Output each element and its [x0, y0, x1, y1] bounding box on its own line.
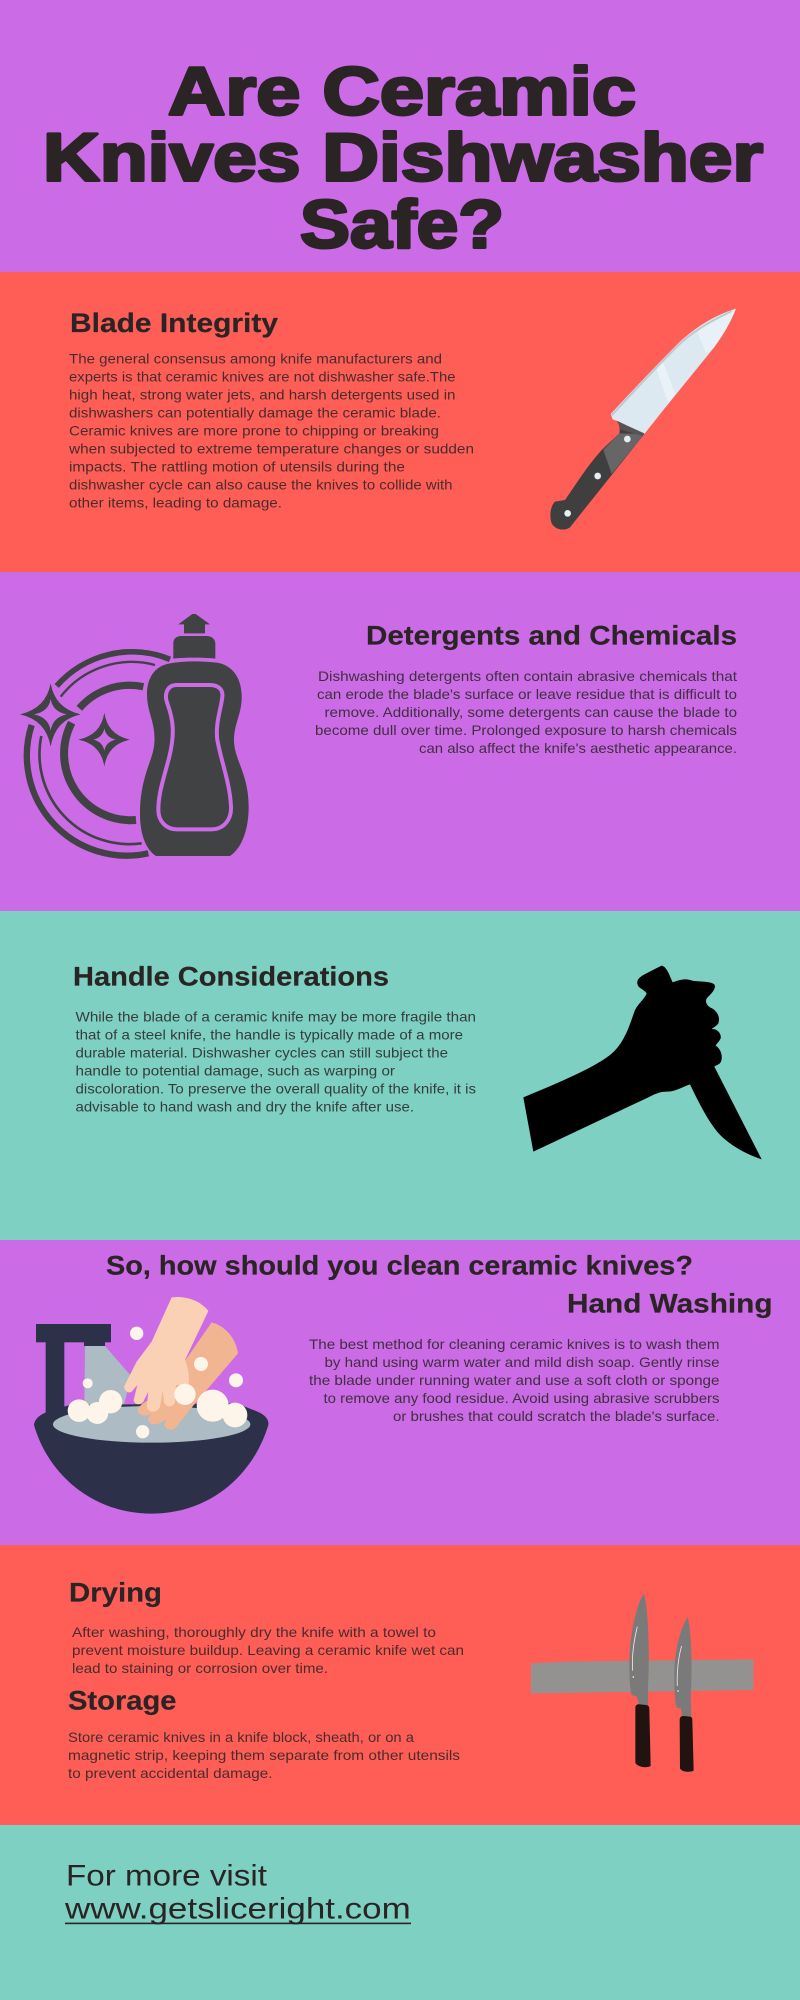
text block: hand washing: The best method for cleaning ceramic knives is to wash them	[309, 1337, 720, 1352]
text block: handle: handle to potential damage, such as warping or	[76, 1064, 396, 1079]
text block: detergents: remove. Additionally, some detergents can cause the blade to	[324, 705, 737, 720]
text block: detergents: become dull over time. Prolonged exposure to harsh chemicals	[315, 723, 737, 738]
heading: hand washing: Hand Washing	[567, 1289, 772, 1319]
text block: detergents: can erode the blade's surface or leave residue that is difficult to	[317, 687, 737, 702]
text block: blade integrity: high heat, strong water jets, and harsh detergents used in	[69, 387, 456, 402]
text block: for more visit	[64, 1859, 411, 1926]
text block: blade integrity: when subjected to extreme temperature changes or sudden	[68, 441, 474, 456]
text block: blade integrity: Ceramic knives are more prone to chipping or breaking	[69, 423, 439, 438]
icon: hand gripping knife	[523, 966, 762, 1159]
heading: drying: Drying	[69, 1578, 162, 1608]
text block: detergents	[315, 669, 737, 756]
heading: detergents and chemicals: Detergents and Chemicals	[366, 621, 737, 651]
title: Are Ceramic	[168, 54, 636, 130]
heading: storage: Storage	[68, 1686, 176, 1716]
text block: hand washing: to remove any food residue. Avoid using abrasive scrubbers	[324, 1391, 720, 1406]
text block: handle: durable material. Dishwasher cycles can still subject the	[76, 1046, 448, 1061]
text block: handle: advisable to hand wash and dry the knife after use.	[76, 1100, 414, 1115]
text block: hand washing: by hand using warm water and mild dish soap. Gently rinse	[324, 1355, 720, 1370]
text block: detergents: can also affect the knife's aesthetic appearance.	[419, 741, 737, 756]
heading: blade integrity: Blade Integrity	[70, 308, 278, 338]
heading: so, how should you clean: So, how should you clean ceramic knives?	[106, 1250, 693, 1280]
text block: handle: that of a steel knife, the handle is typically made of a more	[76, 1028, 463, 1043]
icon: hands washing in basin	[34, 1297, 268, 1514]
panel: blade integrity	[0, 272, 800, 572]
text block: storage: magnetic strip, keeping them separate from other utensils	[68, 1748, 460, 1763]
icon: chef knife	[550, 309, 736, 530]
text block: hand washing: the blade under running water and use a soft cloth or sponge	[309, 1373, 720, 1388]
text block: drying: prevent moisture buildup. Leaving a ceramic knife wet can	[72, 1643, 464, 1658]
title: Safe?	[300, 186, 504, 262]
text block: blade integrity: The general consensus among knife manufacturers and	[69, 351, 442, 366]
panel: how to clean	[0, 1240, 800, 1545]
text block: drying: lead to staining or corrosion over time.	[72, 1661, 328, 1676]
text block: blade integrity: other items, leading to damage.	[69, 495, 282, 510]
text block: blade integrity: dishwasher cycle can also cause the knives to collide with	[69, 477, 452, 492]
text block: blade integrity: dishwashers can potentially damage the ceramic blade.	[69, 405, 441, 420]
icon: dish soap bottle and plate	[20, 614, 249, 856]
text block: handle: discoloration. To preserve the overall quality of the knife, it is	[76, 1082, 476, 1097]
text block: handle	[76, 1010, 476, 1115]
text block: hand washing	[309, 1337, 720, 1424]
text block: hand washing: or brushes that could scratch the blade's surface.	[393, 1409, 720, 1424]
text block: storage: Store ceramic knives in a knife block, sheath, or on a	[68, 1730, 414, 1745]
text block: handle: While the blade of a ceramic knife may be more fragile than	[76, 1010, 476, 1025]
text block: blade integrity: impacts. The rattling motion of utensils during the	[69, 459, 405, 474]
text block: drying	[72, 1625, 464, 1676]
panel: title	[0, 0, 800, 272]
text block: detergents: Dishwashing detergents often contain abrasive chemicals that	[318, 669, 737, 684]
panel: detergents and chemicals	[0, 572, 800, 911]
panel: handle considerations	[0, 911, 800, 1240]
text block: blade integrity: experts is that ceramic knives are not dishwasher safe.The	[69, 369, 456, 384]
panel: drying and storage	[0, 1545, 800, 1825]
heading: handle considerations: Handle Considerations	[73, 962, 389, 992]
text block: storage	[68, 1730, 460, 1781]
text block: storage: to prevent accidental damage.	[68, 1766, 272, 1781]
text block: for more visit: For more visit	[66, 1859, 268, 1892]
title: Knives Dishwasher	[43, 120, 763, 196]
panel: footer	[0, 1825, 800, 2000]
text block: blade integrity	[68, 351, 474, 510]
text block: for more visit: www.getsliceright.com	[64, 1893, 411, 1926]
icon: knives on magnetic strip	[531, 1594, 753, 1772]
text block: drying: After washing, thoroughly dry the knife with a towel to	[72, 1625, 436, 1640]
title	[43, 54, 763, 262]
